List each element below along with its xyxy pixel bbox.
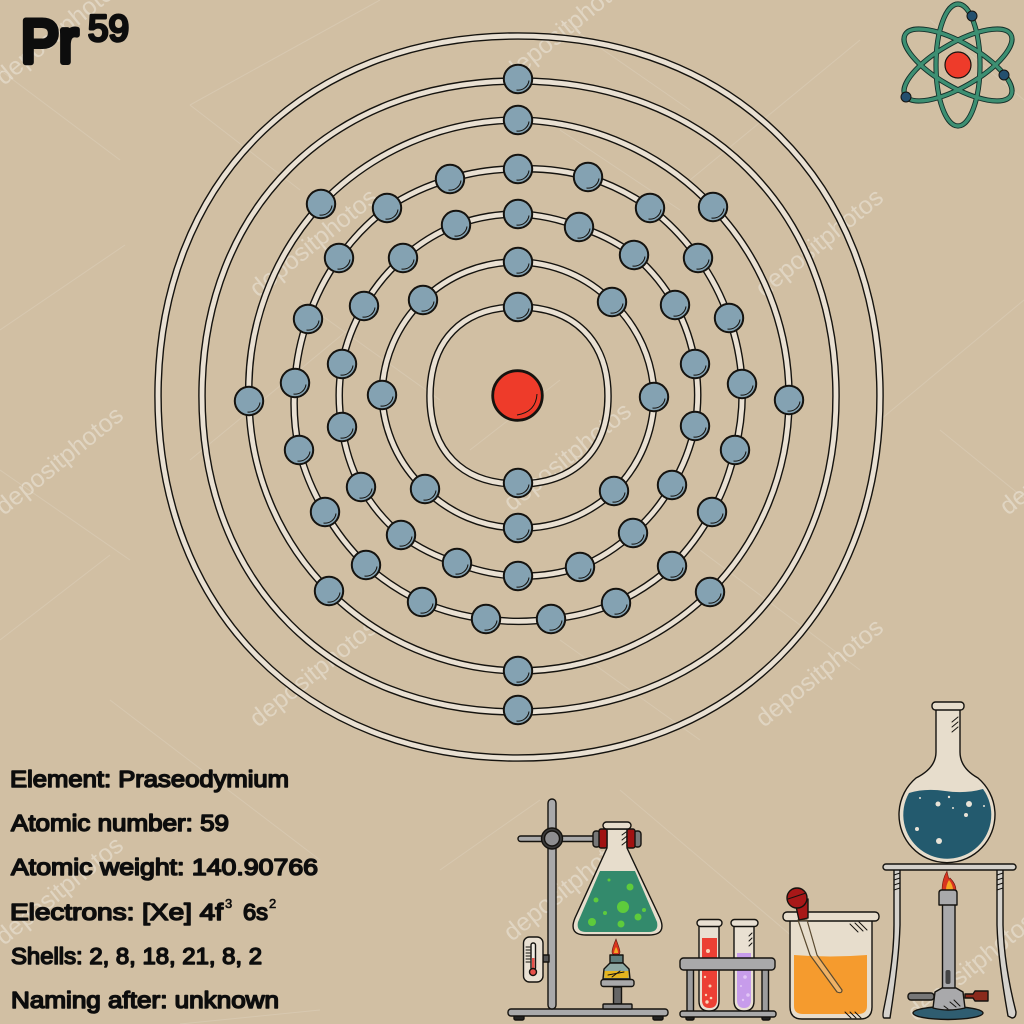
fact: naming: Naming after: unknown — [11, 987, 279, 1013]
round bottom flask with blue liquid — [899, 702, 995, 863]
bunsen burner — [908, 871, 988, 1020]
conical flask with green liquid — [573, 822, 662, 935]
fact: atomic weight: Atomic weight: 140.90766 — [11, 854, 318, 880]
fact: electron configuration — [10, 896, 276, 925]
watermark: depositphotos — [750, 613, 889, 733]
shell 4: 21 electrons — [281, 155, 756, 633]
fact: electron configuration: 2 — [269, 896, 276, 911]
title: element symbol and atomic number — [21, 8, 129, 75]
watermark: depositphotos — [244, 183, 383, 303]
test tube: purple liquid — [731, 920, 758, 1011]
shell 3: 18 electrons — [328, 200, 709, 590]
title: element symbol and atomic number: Pr — [21, 8, 78, 75]
icon: atom — [894, 4, 1022, 126]
fact: element name: Element: Praseodymium — [10, 766, 289, 792]
fact: electron configuration: Electrons: [Xe] 4f — [10, 899, 224, 925]
element facts text block — [10, 766, 318, 1013]
title: element symbol and atomic number: 59 — [88, 8, 129, 49]
retort stand with conical flask — [508, 799, 668, 1020]
shell 1: 2 electrons — [430, 293, 608, 497]
test tube: red liquid — [697, 920, 722, 1011]
beaker with dropper — [783, 888, 879, 1019]
dropper — [787, 888, 842, 993]
atom diagram — [158, 36, 880, 758]
tripod stand — [883, 864, 1016, 1018]
empty outermost ring — [158, 36, 880, 758]
shell 5: 8 electrons — [235, 106, 803, 685]
thermometer — [524, 937, 543, 982]
shell 2: 8 electrons — [368, 248, 668, 542]
fact: shells: Shells: 2, 8, 18, 21, 8, 2 — [11, 943, 262, 969]
watermark: depositphotos — [750, 183, 889, 303]
test tube rack — [680, 920, 776, 1020]
flask clamp — [593, 829, 641, 848]
stand — [508, 799, 668, 1020]
small spirit burner — [601, 939, 634, 1009]
nucleus — [493, 371, 542, 420]
fact: electron configuration: 3 — [225, 896, 232, 911]
watermark: depositphotos — [498, 397, 637, 517]
watermark: depositphotos — [244, 613, 383, 733]
fact: electron configuration: 6s — [243, 899, 268, 925]
fact: atomic number: Atomic number: 59 — [11, 810, 229, 836]
watermark: depositphotos — [498, 827, 637, 947]
shell 6: 2 electrons — [202, 65, 836, 724]
